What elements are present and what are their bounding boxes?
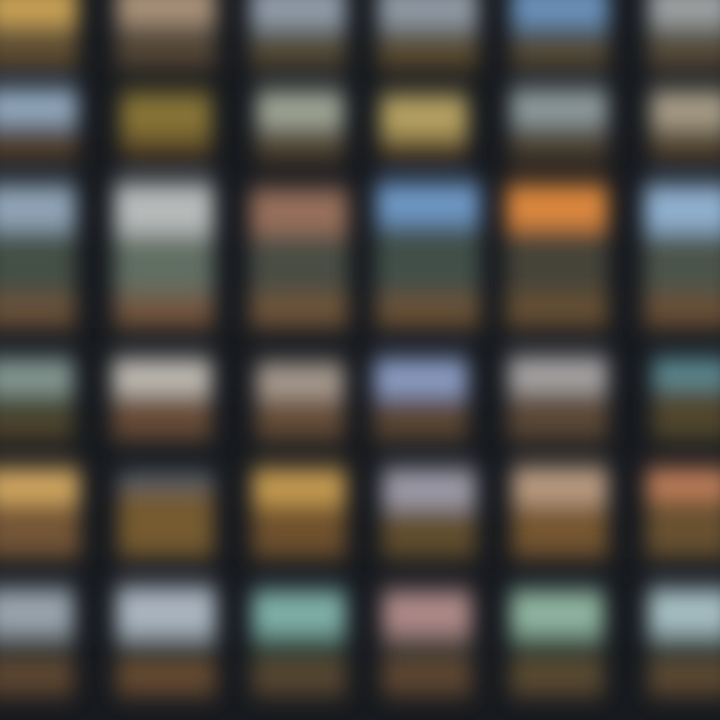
tile r6c4 xyxy=(382,590,472,696)
tile r4c1 xyxy=(0,358,74,440)
tile r2c3 xyxy=(256,90,344,160)
tile r1c1 xyxy=(0,0,78,68)
tile r5c3 xyxy=(252,468,346,558)
tile r2c6 xyxy=(650,90,720,160)
tile r2c1 xyxy=(0,88,78,160)
tile r3c6 xyxy=(644,184,720,328)
tile r4c4 xyxy=(374,358,468,440)
tile r6c3 xyxy=(252,590,346,696)
tile r3c4 xyxy=(376,182,480,328)
tile r5c5 xyxy=(512,466,608,558)
tile r6c2 xyxy=(116,586,216,696)
tile r4c6 xyxy=(652,358,720,440)
tile r1c3 xyxy=(250,0,346,68)
tile r5c1 xyxy=(0,468,80,558)
tile r3c2 xyxy=(114,182,214,328)
tile r1c6 xyxy=(648,0,720,68)
tile r2c2 xyxy=(120,92,212,160)
tile r1c2 xyxy=(116,0,216,68)
tile r4c3 xyxy=(256,362,344,440)
tile r5c4 xyxy=(382,468,476,558)
tile r6c5 xyxy=(510,590,604,696)
tile r3c1 xyxy=(0,184,76,328)
tile r4c2 xyxy=(112,358,212,440)
tile r6c1 xyxy=(0,588,74,696)
tile r1c4 xyxy=(378,0,478,68)
tile r6c6 xyxy=(648,588,720,696)
tile r2c5 xyxy=(510,88,608,160)
tile r3c3 xyxy=(250,188,348,328)
tile r1c5 xyxy=(511,0,609,68)
tile r5c2 xyxy=(118,472,214,558)
tile r2c4 xyxy=(380,94,468,160)
tile r4c5 xyxy=(508,356,608,440)
tile r3c5 xyxy=(506,184,608,328)
tile r5c6 xyxy=(646,468,720,558)
